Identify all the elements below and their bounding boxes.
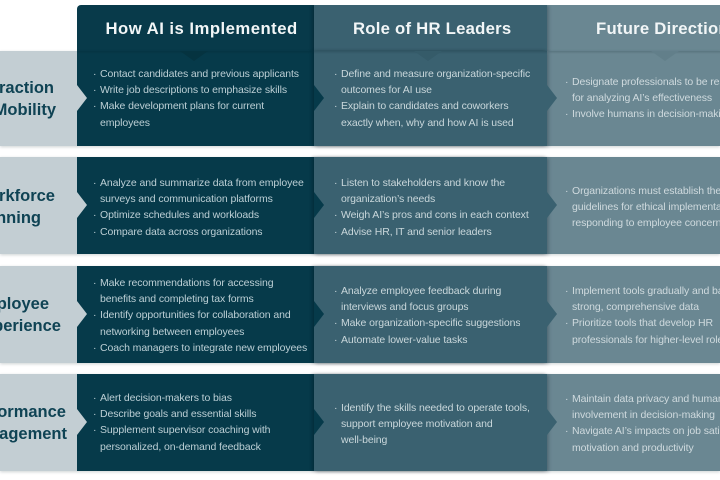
list: implementation: Make recommendations for accessing	[100, 277, 273, 289]
list: HR role	[335, 402, 530, 446]
column header: Role of HR Leaders	[314, 5, 547, 51]
arrow: column 1 to column 2	[314, 301, 324, 327]
cell: future directions	[547, 51, 720, 146]
list: HR role: Weigh AI’s pros and cons in each context	[341, 209, 529, 221]
row 3: Employee Experience	[0, 266, 720, 363]
header notch: column 1	[184, 53, 204, 60]
arrow: column 1 to column 2	[314, 192, 324, 218]
list: HR role: Listen to stakeholders and know the	[341, 177, 505, 189]
list: HR role: Analyze employee feedback during	[341, 285, 501, 297]
cell: how AI is implemented	[77, 51, 314, 146]
list: HR role: Explain to candidates and coworkers	[341, 100, 509, 112]
list: HR role	[335, 68, 530, 129]
list: HR role	[335, 177, 529, 238]
list: implementation: Analyze and summarize data from employee	[100, 177, 304, 189]
list: implementation: employees	[100, 117, 150, 129]
list: implementation: Describe goals and essential skills	[100, 408, 256, 420]
list: future: motivation and productivity	[572, 442, 694, 454]
list: implementation: Compare data across organizations	[100, 226, 262, 238]
list: future	[566, 76, 720, 120]
list: implementation: Identify opportunities for collaboration and	[100, 309, 291, 321]
row 2: Workforce Planning	[0, 157, 720, 254]
cell: role of HR leaders	[314, 157, 547, 254]
list: implementation: Coach managers to integrate new employees	[100, 342, 307, 354]
cell: future directions	[547, 374, 720, 471]
cell: how AI is implemented	[77, 374, 314, 471]
row 1: Attraction and Mobility	[0, 51, 720, 146]
cell: future directions	[547, 266, 720, 363]
cell: future directions	[547, 157, 720, 254]
list: HR role: Define and measure organization-specific	[341, 68, 530, 80]
arrow: label to column 1	[77, 192, 87, 218]
column header: How AI is Implemented	[77, 5, 314, 51]
list: HR role: Automate lower-value tasks	[341, 334, 467, 346]
header notch: column 2	[414, 51, 442, 61]
list: future: for analyzing AI’s effectiveness	[572, 92, 712, 104]
column header: Role of HR Leaders: Role of HR Leaders	[353, 19, 511, 38]
row label	[0, 266, 77, 363]
list: implementation	[94, 392, 270, 453]
arrow: column 2 to column 3	[547, 85, 557, 111]
cell: role of HR leaders	[314, 51, 547, 146]
cell: role of HR leaders	[314, 266, 547, 363]
list: implementation: Optimize schedules and workloads	[100, 209, 259, 221]
list: implementation: Contact candidates and previous applicants	[100, 68, 299, 80]
row label	[0, 374, 77, 471]
list: future: Maintain data privacy and human	[572, 393, 720, 405]
header shadow band	[77, 51, 720, 54]
list: future: strong, comprehensive data	[572, 301, 699, 313]
list: implementation: networking between employees	[100, 326, 244, 338]
list: implementation: Alert decision-makers to bias	[100, 392, 232, 404]
column header: How AI is Implemented: How AI is Implemented	[106, 19, 298, 38]
list: HR role	[335, 285, 520, 346]
list: HR role: Identify the skills needed to operate tools,	[341, 402, 530, 414]
row label	[0, 157, 77, 254]
column header: Future Directions	[547, 5, 720, 51]
arrow: column 2 to column 3	[547, 301, 557, 327]
list: HR role: Advise HR, IT and senior leaders	[341, 226, 492, 238]
list: implementation: surveys and communication platforms	[100, 193, 273, 205]
arrow: column 1 to column 2	[314, 85, 324, 111]
list: HR role: Make organization-specific suggestions	[341, 317, 520, 329]
list: HR role: exactly when, why and how AI is used	[341, 117, 514, 129]
list: HR role: interviews and focus groups	[341, 301, 468, 313]
list: future: Prioritize tools that develop HR	[572, 317, 713, 329]
list: future	[566, 185, 720, 229]
cell: how AI is implemented	[77, 157, 314, 254]
list: implementation: benefits and completing tax forms	[100, 293, 254, 305]
arrow: column 1 to column 2	[314, 409, 324, 435]
list: future: involvement in decision-making	[572, 409, 715, 421]
header notch: column 3	[652, 51, 678, 60]
list: implementation: Make development plans for current	[100, 100, 264, 112]
list: HR role: outcomes for AI use	[341, 84, 432, 96]
arrow: column 2 to column 3	[547, 192, 557, 218]
row 4: Performance Management	[0, 374, 720, 471]
header row	[77, 5, 720, 51]
arrow: label to column 1	[77, 409, 87, 435]
list: implementation: personalized, on-demand feedback	[100, 441, 261, 453]
list: future	[566, 393, 720, 454]
list: HR role: support employee motivation and	[341, 418, 493, 430]
arrow: label to column 1	[77, 85, 87, 111]
list: implementation	[94, 177, 304, 238]
arrow: label to column 1	[77, 301, 87, 327]
list: implementation: Supplement supervisor coaching with	[100, 424, 270, 436]
list: implementation: Write job descriptions to emphasize skills	[100, 84, 287, 96]
list: HR role: well-being	[341, 434, 387, 446]
cell: role of HR leaders	[314, 374, 547, 471]
list: implementation	[94, 277, 307, 354]
list: implementation	[94, 68, 299, 129]
arrow: column 2 to column 3	[547, 409, 557, 435]
list: future	[566, 285, 720, 346]
list: HR role: organization’s needs	[341, 193, 435, 205]
row label	[0, 51, 77, 146]
cell: how AI is implemented	[77, 266, 314, 363]
